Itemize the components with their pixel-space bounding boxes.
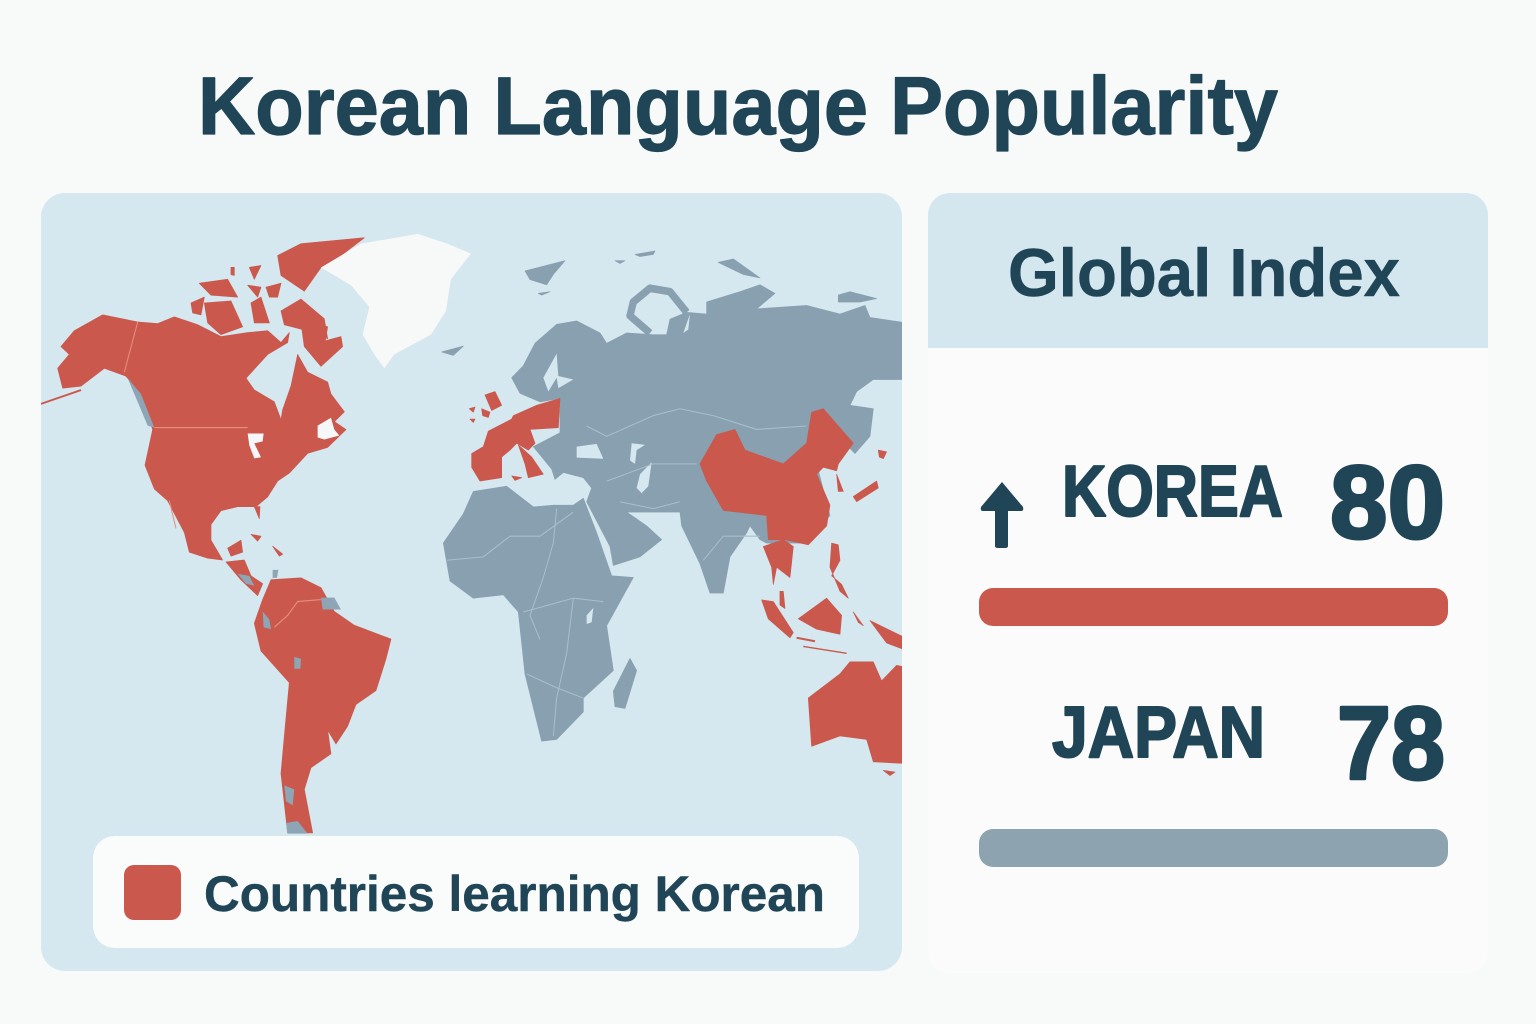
Southeast Asia (763, 540, 793, 584)
legend label: Countries learning Korean (204, 866, 825, 922)
North America (58, 315, 346, 560)
Arctic islands (525, 261, 565, 285)
panel heading: Global Index (1008, 235, 1400, 311)
map: red countries Europe and Asia-Pacific (469, 392, 905, 776)
legend swatch (124, 865, 181, 920)
JAPAN label: JAPAN (1052, 693, 1265, 773)
map: Greenland (321, 234, 471, 368)
Australia (808, 662, 905, 763)
panel: world map (41, 193, 905, 971)
Philippines (830, 543, 848, 598)
Arctic islands (278, 238, 364, 291)
inland seas (543, 314, 690, 624)
Africa (443, 486, 633, 741)
legend (93, 836, 859, 948)
KOREA label: KOREA (1062, 452, 1283, 532)
Great Lakes and Gulf of St Lawrence (248, 418, 339, 458)
South America (254, 578, 391, 833)
icon: up arrow (981, 482, 1023, 548)
KOREA bar (979, 588, 1448, 626)
rivers and borders (447, 409, 807, 736)
Central America (228, 540, 243, 556)
JAPAN bar (979, 829, 1448, 867)
panel header (928, 193, 1488, 348)
title: Korean Language Popularity (198, 61, 1278, 152)
map: Americas (41, 238, 391, 834)
Eurasia (512, 285, 905, 593)
Korea and Japan (837, 474, 843, 491)
Indonesia (762, 600, 793, 638)
map: Eurasia and Africa (442, 251, 905, 741)
panel: global index (928, 193, 1488, 867)
KOREA value: 80 (1330, 445, 1445, 561)
JAPAN value: 78 (1337, 686, 1445, 802)
Europe (472, 398, 560, 481)
China (700, 409, 853, 545)
